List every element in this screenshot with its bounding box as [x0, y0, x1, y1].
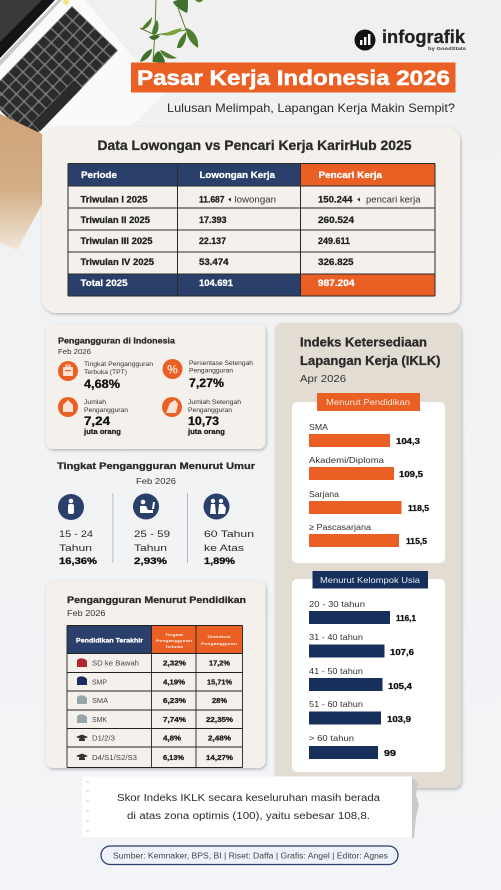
card: menurut pendidikan [292, 393, 445, 563]
logo: by GoodStats [428, 46, 467, 51]
table: education: D1/2/3 [92, 734, 115, 742]
bar: 20-30 [309, 599, 417, 624]
age group 15-24 [58, 494, 97, 566]
bar: 51-60 [309, 699, 411, 724]
age group 60+: 1,89% [204, 556, 235, 566]
table: quarterly data: Triwulan III 2025 [80, 236, 152, 246]
table: education: 15,71% [207, 680, 233, 686]
table: education: Tingkat [165, 633, 184, 637]
image: plant [140, 0, 203, 63]
age group 15-24: Tahun [59, 543, 92, 554]
stat: TPT: 4,68% [84, 379, 120, 391]
table: quarterly data: 260.524 [318, 215, 354, 225]
panel: pengangguran menurut pendidikan [46, 581, 266, 768]
stat: jumlah pengangguran [58, 397, 128, 436]
stat: persentase setengah pengangguran: 7,27% [189, 378, 224, 390]
card: menurut pendidikan: Menurut Pendidikan [326, 397, 410, 407]
table: education: 28% [212, 698, 228, 705]
bar: SMA: SMA [309, 422, 328, 432]
source pill [101, 846, 398, 864]
stat: jumlah setengah pengangguran: Jumlah Setengah [188, 399, 241, 406]
logo: infografik [382, 26, 466, 47]
date: Feb 2026 [67, 609, 106, 618]
stat: TPT [58, 361, 153, 391]
stat: jumlah pengangguran: Pengangguran [84, 407, 128, 414]
heading: Pengangguran Menurut Pendidikan [67, 595, 246, 606]
age group 15-24: 15 - 24 [59, 529, 93, 540]
age group 15-24: 16,36% [59, 556, 97, 566]
panel: pengangguran di indonesia [46, 324, 266, 449]
table: education: 6,13% [163, 755, 185, 762]
callout: IKLK note [82, 776, 419, 838]
table: education: D4/S1/S2/S3 [92, 753, 137, 762]
source pill: Sumber: Kemnaker, BPS, BI | Riset: Daffa | Grafis: Angel | Editor: Agnes [113, 852, 388, 860]
table: education: SMP [92, 678, 107, 686]
table: quarterly data: 104.691 [199, 278, 233, 288]
table: quarterly data: 326.825 [318, 257, 354, 267]
logo [354, 26, 467, 51]
table: education: Pengangguran [156, 639, 193, 643]
icon: graduation cap [76, 754, 88, 760]
title [131, 62, 456, 92]
bar: akademi: 109,5 [399, 469, 423, 479]
table: quarterly data: 17.393 [199, 215, 226, 225]
panel: IKLK: Lapangan Kerja (IKLK) [300, 354, 440, 368]
callout: IKLK note: di atas zona optimis (100), yaitu sebesar 108,8. [127, 811, 370, 822]
table: quarterly data: 11.687 [199, 194, 224, 204]
table: quarterly data: Triwulan I 2025 [80, 194, 148, 204]
stat: TPT: Tingkat Pengangguran [84, 361, 153, 368]
bar: 20-30: 20 - 30 tahun [309, 599, 365, 609]
table: education: SMK [92, 715, 107, 724]
table: education: 22,35% [206, 717, 234, 724]
stat: jumlah setengah pengangguran: 10,73 [188, 416, 219, 428]
age group 60+ [204, 494, 254, 566]
age group 60+: ke Atas [204, 543, 244, 554]
heading: Indeks Ketersediaan [300, 336, 427, 350]
stat: jumlah pengangguran: Jumlah [84, 399, 106, 406]
card: menurut kelompok usia [292, 571, 445, 772]
date: Feb 2026 [58, 347, 91, 356]
bar: akademi: Akademi/Diploma [309, 455, 384, 465]
bar: pascasarjana: ≥ Pascasarjana [309, 522, 371, 532]
bar: 60+: > 60 tahun [309, 733, 354, 743]
panel: lowongan vs pencari kerja [42, 127, 460, 313]
table: education: 2,32% [163, 660, 187, 668]
age group 25-59: Tahun [134, 543, 167, 554]
table: quarterly data: 53.474 [199, 257, 228, 267]
table: quarterly data: pencari kerja [366, 194, 420, 204]
table: education: 4,8% [163, 736, 182, 742]
table: quarterly data: Lowongan Kerja [200, 170, 276, 180]
table: quarterly data: Triwulan IV 2025 [80, 257, 154, 267]
table: quarterly data: 22.137 [199, 236, 226, 246]
stat: persentase setengah pengangguran: % [167, 362, 178, 376]
age group 25-59 [133, 494, 170, 566]
table: quarterly data: 987.204 [318, 278, 354, 288]
bar: pascasarjana: 115,5 [406, 537, 428, 546]
bar: 31-40: 107,6 [390, 647, 414, 657]
bar: 20-30: 116,1 [396, 614, 417, 623]
panel: IKLK [275, 323, 461, 788]
heading: table title: Data Lowongan vs Pencari Kerja KarirHub 2025 [98, 137, 412, 153]
icon: graduation cap [76, 734, 88, 741]
icon: grey hat [77, 714, 87, 723]
table: education: SMA [92, 696, 108, 705]
bar: 41-50: 105,4 [388, 681, 412, 691]
bar: sarjana [309, 489, 430, 514]
table: education: Pengangguran [201, 642, 238, 646]
table: education: SD ke Bawah [92, 658, 139, 668]
image: laptop [0, 0, 164, 140]
bar: 60+ [309, 733, 396, 759]
age group 25-59: 2,93% [134, 556, 167, 566]
table: education: 4,19% [163, 680, 186, 686]
icon: grey hat [77, 695, 87, 704]
stat: jumlah setengah pengangguran [162, 397, 241, 436]
table: education: 14,27% [206, 755, 234, 762]
stat: jumlah pengangguran: 7,24 [84, 416, 111, 428]
age group 25-59: 25 - 59 [134, 529, 170, 540]
table: education [67, 626, 242, 768]
heading: Tingkat Pengangguran Menurut Umur [57, 461, 255, 472]
stat: persentase setengah pengangguran: Pengangguran [189, 368, 233, 374]
subtitle: Lulusan Melimpah, Lapangan Kerja Makin Sempit? [167, 101, 455, 115]
bar: 41-50 [309, 666, 412, 691]
date: Apr 2026 [300, 374, 346, 385]
heading: Pengangguran di Indonesia [58, 336, 175, 346]
table: education: 17,2% [209, 660, 231, 668]
table: education: Distribusi [208, 635, 230, 639]
table: quarterly data: 249.611 [318, 236, 350, 246]
icon: red hat [77, 658, 87, 667]
bar: SMA [309, 422, 420, 447]
card: menurut kelompok usia: Menurut Kelompok Usia [320, 575, 420, 585]
stat: TPT: Terbuka (TPT) [84, 369, 127, 376]
stat: persentase setengah pengangguran [162, 359, 253, 390]
bar: sarjana: 118,5 [408, 504, 430, 513]
table: quarterly data: 150.244 [318, 194, 352, 204]
bar: 51-60: 51 - 60 tahun [309, 699, 363, 709]
table: quarterly data: Total 2025 [80, 278, 128, 288]
bar: 31-40 [309, 632, 414, 658]
bar: SMA: 104,3 [396, 436, 420, 446]
table: quarterly data: Periode [81, 170, 117, 180]
table: quarterly data: Pencari Kerja [318, 170, 383, 180]
icon: navy hat [77, 676, 87, 685]
stat: jumlah setengah pengangguran: Pengangguran [188, 407, 232, 414]
table: quarterly data: Triwulan II 2025 [80, 215, 150, 225]
table: quarterly data [68, 164, 435, 296]
bar: 31-40: 31 - 40 tahun [309, 632, 363, 642]
age group 60+: 60 Tahun [204, 529, 254, 540]
stat: jumlah pengangguran: juta orang [83, 427, 121, 436]
image: paper sheet [0, 114, 46, 250]
callout: IKLK note: Skor Indeks IKLK secara keseluruhan masih berada [117, 793, 380, 804]
stat: jumlah setengah pengangguran: juta orang [187, 427, 225, 436]
table: quarterly data: lowongan [234, 194, 276, 204]
title: Pasar Kerja Indonesia 2026 [137, 66, 450, 90]
date: Feb 2026 [136, 477, 177, 486]
table: education: Terbuka [165, 645, 184, 649]
section: tingkat pengangguran menurut umur [57, 461, 255, 566]
bar: sarjana: Sarjana [309, 489, 339, 499]
bar: 51-60: 103,9 [387, 714, 411, 724]
table: education: 7,74% [163, 717, 187, 724]
table: education: Pendidikan Terakhir [76, 638, 143, 644]
bar: 41-50: 41 - 50 tahun [309, 666, 363, 676]
bar: 60+: 99 [384, 748, 396, 758]
bar: pascasarjana [309, 522, 428, 547]
table: education: 2,48% [208, 736, 232, 742]
table: education: 6,23% [163, 698, 187, 705]
stat: persentase setengah pengangguran: Persentase Setengah [189, 360, 253, 367]
bar: akademi [309, 455, 423, 480]
